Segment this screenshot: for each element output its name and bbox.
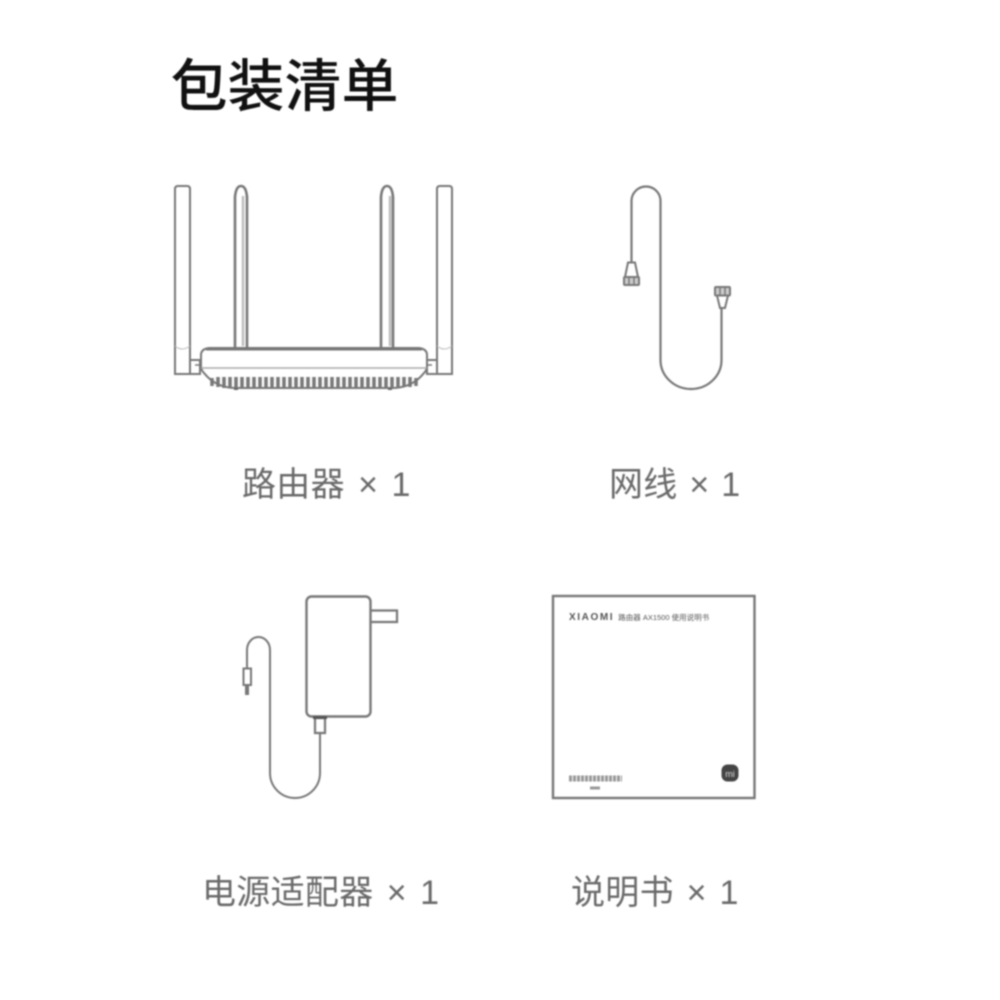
label: manual: 说明书 × 1 [571, 874, 739, 912]
Mi logo [722, 766, 738, 780]
label: router: 路由器 × 1 [242, 466, 411, 504]
barcode [569, 778, 622, 788]
manual cover text: XIAOMI 路由器 AX1500 使用说明书 [569, 612, 710, 623]
icon: ethernet cable [624, 186, 730, 389]
Mi logo: mi [725, 769, 735, 779]
icon: power adapter [244, 596, 397, 798]
icon: router [175, 186, 452, 390]
icon: manual [553, 596, 754, 798]
label: ethernet cable: 网线 × 1 [609, 466, 740, 504]
title: 包装清单 [170, 55, 398, 119]
label: power adapter: 电源适配器 × 1 [202, 874, 439, 912]
